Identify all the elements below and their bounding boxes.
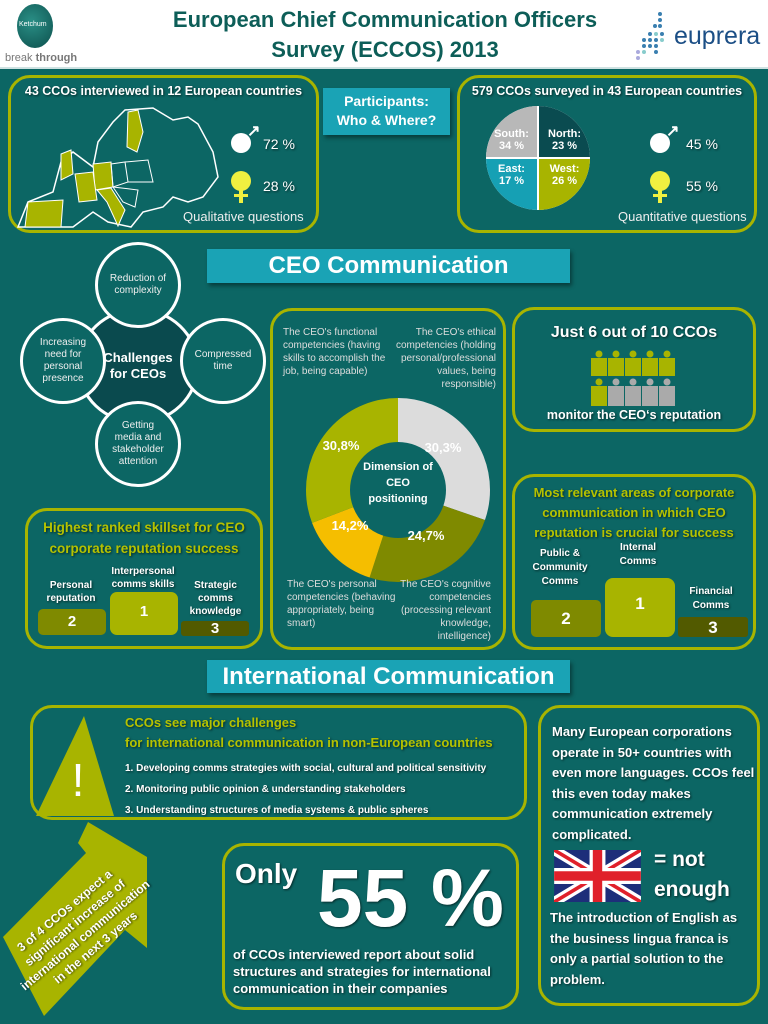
icon: UK flag (554, 850, 641, 902)
panel: major challenges: CCOs see major challenges (125, 715, 296, 730)
title: Survey (ECCOS) 2013 (271, 37, 499, 62)
logo: ketchum: break through (5, 52, 77, 64)
panel: most relevant areas: 3 (708, 618, 718, 637)
banner: CEO Communication: CEO Communication (268, 252, 508, 279)
banner: CEO Communication (207, 249, 570, 283)
pie chart: 26 % (552, 175, 577, 187)
banner: participants (323, 88, 450, 135)
diagram: challenges for CEOs: stakeholder (112, 444, 164, 455)
panel: skillset: reputation (47, 593, 95, 604)
panel: skillset: Interpersonal (111, 566, 175, 577)
panel: quantitative: 45 % (686, 136, 718, 152)
donut: Dimension of (363, 461, 433, 473)
diagram: challenges for CEOs: need for (45, 349, 81, 360)
panel: major challenges: for international communication in non-European countries (125, 735, 493, 750)
diagram: challenges for CEOs: attention (119, 456, 157, 467)
panel: skillset: 3 (211, 620, 219, 637)
donut: 14,2% (332, 518, 369, 533)
panel: donut chart: The CEO's personal competencies (behaving appropriately, being smart) (287, 579, 395, 629)
panel: donut chart: The CEO's cognitive competencies (processing relevant knowledge, intelligence) (400, 579, 491, 642)
panel: english lingua franca: enough (654, 878, 730, 901)
panel: most relevant areas (512, 474, 756, 650)
panel: only 55%: 55 % (317, 853, 504, 944)
icon: warning triangle (36, 716, 114, 816)
pie chart: 34 % (499, 140, 524, 152)
panel: skillset: Personal (50, 580, 92, 591)
pie chart: West: (550, 163, 579, 175)
panel: most relevant areas: Most relevant areas of corporate communication in which CEO reputation is crucial for success (534, 485, 734, 540)
panel: qualitative (8, 75, 319, 233)
banner: International Communication: International Communication (222, 663, 554, 690)
diagram: challenges for CEOs: Challenges (103, 350, 173, 365)
panel: quantitative (457, 75, 757, 233)
donut: CEO (386, 477, 410, 489)
panel: major challenges (30, 705, 527, 820)
diagram: challenges for CEOs: personal (44, 361, 82, 372)
pie chart: South: (494, 128, 529, 140)
panel: major challenges: 2. Monitoring public opinion & understanding stakeholders (125, 784, 406, 795)
panel: donut chart (270, 308, 506, 650)
logo: euprera: euprera (674, 22, 760, 50)
panel: qualitative: 72 % (263, 136, 295, 152)
title: European Chief Communication Officers (173, 7, 597, 32)
diagram: challenges for CEOs: Getting (122, 420, 154, 431)
panel: most relevant areas: Community (532, 562, 588, 573)
header (0, 0, 768, 69)
donut: 30,8% (323, 438, 360, 453)
panel: 6 out of 10: Just 6 out of 10 CCOs (551, 324, 717, 341)
pie chart (486, 106, 590, 210)
donut: positioning (368, 493, 428, 505)
panel: skillset: knowledge (190, 606, 241, 617)
diagram: challenges for CEOs: time (214, 361, 232, 372)
panel: english lingua franca (538, 705, 760, 1006)
donut: 30,3% (425, 440, 462, 455)
diagram: challenges for CEOs: for CEOs (110, 366, 166, 381)
diagram: challenges for CEOs: media and (115, 432, 161, 443)
banner: participants: Who & Where? (337, 112, 436, 128)
panel: most relevant areas: Comms (693, 600, 729, 611)
panel: most relevant areas: Comms (542, 576, 578, 587)
icon: warning triangle: ! (72, 754, 84, 806)
icon: male (231, 133, 251, 153)
donut (306, 398, 490, 582)
panel: donut chart: The CEO's ethical competencies (holding personal/professional values, being responsible) (396, 327, 496, 390)
logo: ketchum: Ketchum (19, 21, 47, 28)
panel: quantitative: 55 % (686, 178, 718, 194)
diagram: challenges for CEOs: complexity (114, 285, 162, 296)
panel: most relevant areas: Public & (540, 548, 580, 559)
panel: qualitative: 28 % (263, 178, 295, 194)
panel: skillset (25, 508, 263, 649)
panel: quantitative: ↗ (666, 123, 679, 140)
panel: major challenges: 3. Understanding structures of media systems & public spheres (125, 805, 428, 816)
panel: skillset: 2 (68, 613, 76, 630)
banner: participants: Participants: (344, 93, 429, 109)
panel: english lingua franca: Many European corporations operate in 50+ countries with even more languages. CCOs feel this even today makes communication extremely complicated. (552, 724, 754, 842)
heading: 43 CCOs interviewed in 12 European countries (25, 84, 302, 98)
panel: most relevant areas: Internal (620, 542, 656, 553)
panel: english lingua franca: The introduction of English as the business lingua franca is only a partial solution to the problem. (550, 910, 737, 986)
panel: only 55%: of CCOs interviewed report about solid structures and strategies for international communication in their companies (233, 947, 491, 996)
panel: only 55%: Only (235, 858, 297, 889)
map of europe (16, 107, 219, 228)
panel: most relevant areas: 1 (635, 594, 645, 613)
panel: quantitative: Quantitative questions (618, 209, 747, 224)
diagram: challenges for CEOs: Reduction of (110, 273, 166, 284)
diagram: challenges for CEOs (20, 242, 266, 487)
panel: major challenges: 1. Developing comms strategies with social, cultural and political sensitivity (125, 763, 486, 774)
panel: donut chart: The CEO's functional competencies (having skills to accomplish the job, being capable) (283, 327, 385, 377)
donut: 24,7% (408, 528, 445, 543)
pie chart: 17 % (499, 175, 524, 187)
panel: qualitative: ↗ (247, 123, 260, 140)
panel: 6 out of 10 (512, 307, 756, 432)
diagram: challenges for CEOs: Increasing (40, 337, 86, 348)
pie chart: East: (498, 163, 525, 175)
panel: skillset: Strategic (194, 580, 237, 591)
panel: most relevant areas: 2 (561, 609, 571, 628)
panel: most relevant areas: Financial (689, 586, 733, 597)
panel: skillset: Highest ranked skillset for CEO corporate reputation success (43, 520, 245, 556)
pie chart: North: (548, 128, 581, 140)
diagram: challenges for CEOs: presence (42, 373, 84, 384)
panel: qualitative: Qualitative questions (183, 209, 304, 224)
diagram: challenges for CEOs: Compressed (195, 349, 251, 360)
panel: only 55% (222, 843, 519, 1010)
arrow: 3 of 4 CCOs: 3 of 4 CCOs expect a significant increase of international communication in the next 3 years (14, 867, 152, 993)
panel: most relevant areas: Comms (620, 556, 656, 567)
panel: skillset: 1 (140, 603, 148, 620)
icon: female (231, 171, 251, 191)
panel: skillset: comms (198, 593, 233, 604)
panel: 6 out of 10: monitor the CEO‘s reputation (547, 408, 721, 422)
logo: euprera (636, 12, 760, 60)
panel: quantitative: 579 CCOs surveyed in 43 European countries (472, 84, 742, 98)
logo: ketchum (5, 4, 77, 64)
arrow: 3 of 4 CCOs (3, 822, 152, 1016)
panel: skillset: comms skills (112, 579, 174, 590)
title (173, 7, 597, 62)
icon: people grid (591, 350, 675, 406)
pie chart: 23 % (552, 140, 577, 152)
panel: english lingua franca: = not (654, 848, 705, 871)
